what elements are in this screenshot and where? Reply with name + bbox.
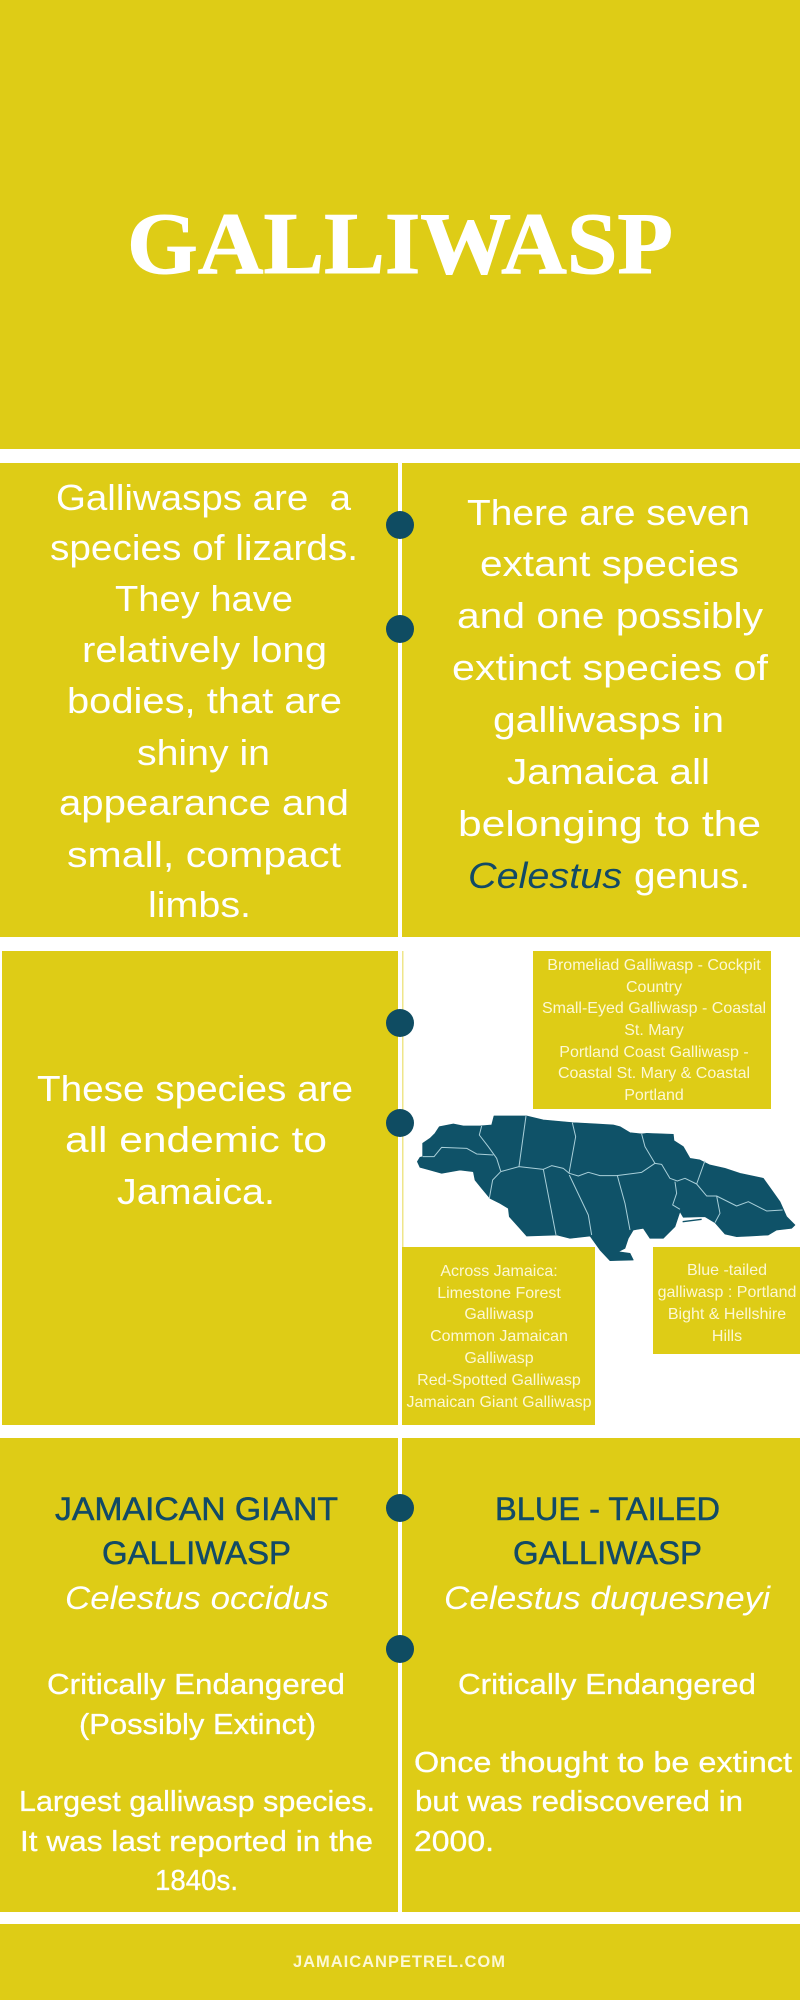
panel: description right: There are seven xyxy=(467,492,750,533)
callout: blue-tailed galliwasp range: galliwasp : Portland xyxy=(658,1284,796,1301)
callout: across Jamaica species xyxy=(402,1247,595,1425)
callout: north coast species xyxy=(533,951,771,1109)
callout: across Jamaica species: Limestone Forest xyxy=(437,1285,561,1302)
panel: Jamaican giant galliwasp: (Possibly Extinct) xyxy=(79,1709,316,1741)
panel: title banner xyxy=(0,0,800,449)
callout: north coast species: Bromeliad Galliwasp - Cockpit xyxy=(547,957,761,974)
panel: blue-tailed galliwasp: Once thought to be extinct xyxy=(414,1747,792,1779)
panel: Jamaican giant galliwasp: Largest galliwasp species. xyxy=(19,1786,375,1818)
panel: description right xyxy=(402,463,800,937)
panel: endemic statement: Jamaica. xyxy=(117,1171,275,1212)
panel: Jamaican giant galliwasp: Critically Endangered xyxy=(47,1669,345,1701)
panel: endemic statement: all endemic to xyxy=(65,1119,327,1160)
callout: north coast species: Coastal St. Mary & Coastal xyxy=(558,1065,750,1082)
panel: description left: Galliwasps are a xyxy=(56,477,352,518)
panel: Jamaican giant galliwasp: GALLIWASP xyxy=(102,1535,291,1571)
panel: blue-tailed galliwasp: GALLIWASP xyxy=(513,1535,702,1571)
panel: blue-tailed galliwasp: but was rediscovered in xyxy=(415,1786,743,1818)
footer: JAMAICANPETREL.COM xyxy=(293,1953,505,1971)
panel: blue-tailed galliwasp: BLUE - TAILED xyxy=(495,1491,720,1527)
panel: Jamaican giant galliwasp: Celestus occidus xyxy=(65,1580,329,1616)
callout: across Jamaica species: Common Jamaican xyxy=(430,1328,568,1345)
panel: Jamaican giant galliwasp xyxy=(0,1438,398,1912)
timeline dots xyxy=(386,511,414,1663)
panel: Jamaican giant galliwasp: JAMAICAN GIANT xyxy=(55,1491,338,1527)
title: GALLIWASP xyxy=(127,196,673,293)
panel: description right: galliwasps in xyxy=(493,699,724,740)
panel: description right: extant species xyxy=(480,543,739,584)
panel: description left: shiny in xyxy=(137,732,270,773)
panel: description right: genus. xyxy=(634,855,750,896)
callout: north coast species: Portland Coast Galliwasp - xyxy=(559,1044,749,1061)
panel: description left: bodies, that are xyxy=(67,680,342,721)
panel: blue-tailed galliwasp: 2000. xyxy=(414,1826,494,1858)
panel: description right: belonging to the xyxy=(458,803,761,844)
panel: endemic statement xyxy=(2,951,398,1425)
panel: description left: They have xyxy=(115,578,293,619)
panel: description left: species of lizards. xyxy=(50,527,358,568)
footer xyxy=(0,1924,800,2000)
panel: endemic statement: These species are xyxy=(37,1068,353,1109)
panel: description left: relatively long xyxy=(82,629,327,670)
panel: description left xyxy=(0,463,398,937)
callout: north coast species: Country xyxy=(626,979,682,996)
panel: description right: extinct species of xyxy=(452,647,769,688)
panel: blue-tailed galliwasp: Celestus duquesneyi xyxy=(444,1580,771,1616)
callout: blue-tailed galliwasp range: Bight & Hellshire xyxy=(668,1306,786,1323)
callout: north coast species: St. Mary xyxy=(624,1022,684,1039)
callout: across Jamaica species: Galliwasp xyxy=(464,1306,534,1323)
panel: blue-tailed galliwasp: Critically Endangered xyxy=(458,1669,756,1701)
callout: blue-tailed galliwasp range: Hills xyxy=(712,1328,742,1345)
panel: description left: small, compact xyxy=(67,834,341,875)
callout: across Jamaica species: Jamaican Giant Galliwasp xyxy=(407,1394,592,1411)
callout: across Jamaica species: Red-Spotted Galliwasp xyxy=(417,1372,581,1389)
callout: across Jamaica species: Across Jamaica: xyxy=(440,1263,558,1280)
panel: blue-tailed galliwasp xyxy=(402,1438,800,1912)
map of Jamaica xyxy=(417,1116,795,1261)
callout: blue-tailed galliwasp range: Blue -tailed xyxy=(687,1262,767,1279)
panel: description left: appearance and xyxy=(59,782,349,823)
callout: across Jamaica species: Galliwasp xyxy=(464,1350,534,1367)
panel: description right: Celestus xyxy=(468,855,622,896)
callout: blue-tailed galliwasp range xyxy=(653,1247,800,1354)
panel: description right: and one possibly xyxy=(457,595,763,636)
panel: Jamaican giant galliwasp: 1840s. xyxy=(155,1865,238,1897)
panel: description left: limbs. xyxy=(148,884,251,925)
callout: north coast species: Small-Eyed Galliwasp - Coastal xyxy=(542,1000,766,1017)
panel: Jamaican giant galliwasp: It was last reported in the xyxy=(20,1826,373,1858)
panel: description right: Jamaica all xyxy=(507,751,710,792)
callout: north coast species: Portland xyxy=(624,1087,684,1104)
